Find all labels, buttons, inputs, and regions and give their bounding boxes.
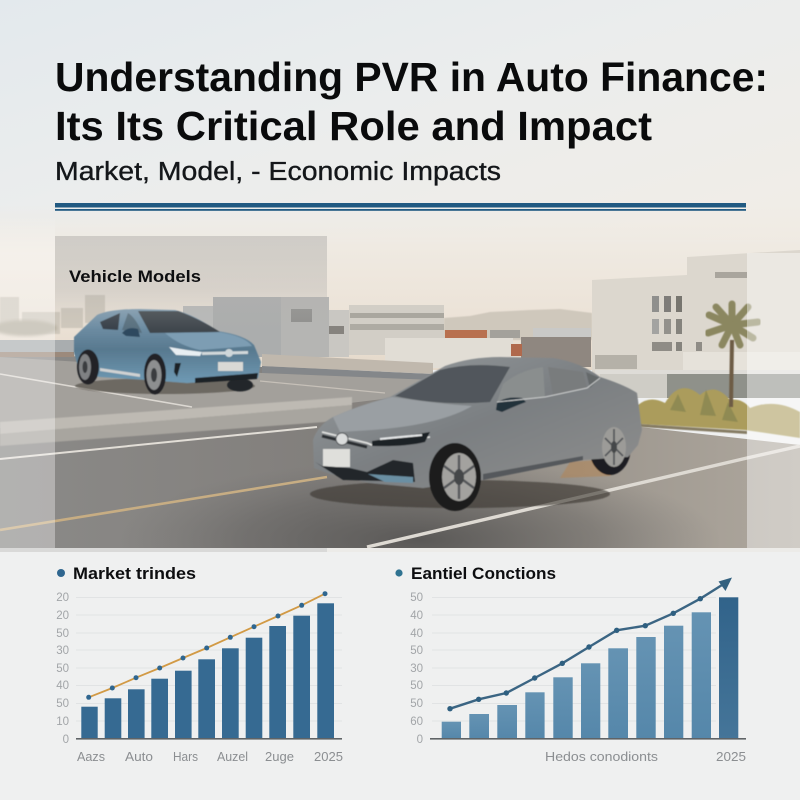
trend line: [86, 591, 328, 700]
y axis labels: 50: [410, 645, 423, 657]
y axis labels: 0: [417, 734, 423, 746]
right white veil: [747, 253, 800, 548]
title: Its Its Critical Role and Impact: [55, 103, 652, 149]
y axis labels: 20: [56, 610, 69, 622]
axis: [430, 738, 746, 740]
title: [55, 54, 768, 149]
y axis labels: 50: [56, 698, 69, 710]
x axis labels: 2025: [314, 750, 343, 764]
y axis labels: 50: [56, 663, 69, 675]
x axis labels: Auto: [125, 750, 153, 764]
car: blue crossover: [74, 309, 261, 394]
distant skyline: [0, 295, 592, 340]
translucent panel overlay behind Vehicle Models: [55, 236, 327, 548]
chart panel: Economic conditions: [395, 565, 746, 764]
near asphalt shading: [120, 460, 720, 620]
x axis labels: [77, 750, 343, 764]
x axis labels: Aazs: [77, 750, 105, 764]
courtyard behind railing: [595, 370, 800, 398]
lower chart background: [0, 552, 800, 800]
far parapet wall: [0, 340, 433, 380]
left trees: [0, 320, 57, 336]
trend line with arrow: [447, 578, 732, 711]
chart heading with dot: Market trindes: [73, 565, 196, 583]
x axis labels: 2uge: [265, 750, 294, 764]
far deck surface: [0, 357, 440, 428]
y axis labels: [56, 592, 69, 746]
car: grey sedan: [310, 357, 642, 511]
y axis labels: [410, 592, 423, 746]
header background: [0, 0, 800, 240]
y axis labels: 30: [410, 663, 423, 675]
y axis labels: 0: [63, 734, 69, 746]
axis: [76, 738, 342, 740]
header double rule: [55, 203, 746, 211]
y axis labels: 50: [56, 628, 69, 640]
chart heading with dot: Eantiel Conctions: [411, 565, 556, 583]
sky: [0, 205, 800, 370]
bars: [81, 603, 334, 739]
x axis labels: [545, 750, 746, 764]
y axis labels: 40: [410, 610, 423, 622]
title: Understanding PVR in Auto Finance:: [55, 54, 768, 100]
hedge: [638, 388, 800, 438]
y axis labels: 50: [410, 698, 423, 710]
subtitle: Market, Model, - Economic Impacts: [55, 158, 501, 186]
x axis labels: Hars: [173, 750, 198, 764]
hero photo: parking deck with two cars: [0, 205, 800, 620]
y axis labels: 40: [56, 680, 69, 692]
y axis labels: 50: [410, 680, 423, 692]
highlighted 2025 bar: [719, 597, 738, 739]
label: Vehicle Models: Vehicle Models: [69, 268, 201, 286]
y axis labels: 30: [56, 645, 69, 657]
y axis labels: 10: [56, 716, 69, 728]
chart panel: Market trends: [56, 565, 343, 764]
y axis labels: 40: [410, 628, 423, 640]
bars: [442, 612, 711, 739]
y axis labels: 20: [56, 592, 69, 604]
curb: [0, 397, 352, 446]
x axis labels: Hedos conodionts: [545, 750, 658, 764]
x axis labels: 2025: [716, 750, 746, 764]
building: grey block: [183, 297, 444, 357]
big building right: [592, 250, 800, 380]
left white veil: [0, 215, 55, 548]
low white buildings: [385, 328, 591, 368]
y axis labels: 60: [410, 716, 423, 728]
parking lines: [0, 374, 800, 547]
ground surface: [0, 352, 800, 548]
palm tree: [708, 304, 758, 407]
y axis labels: 50: [410, 592, 423, 604]
bottom divider strip: [0, 548, 800, 552]
x axis labels: Auzel: [217, 750, 248, 764]
